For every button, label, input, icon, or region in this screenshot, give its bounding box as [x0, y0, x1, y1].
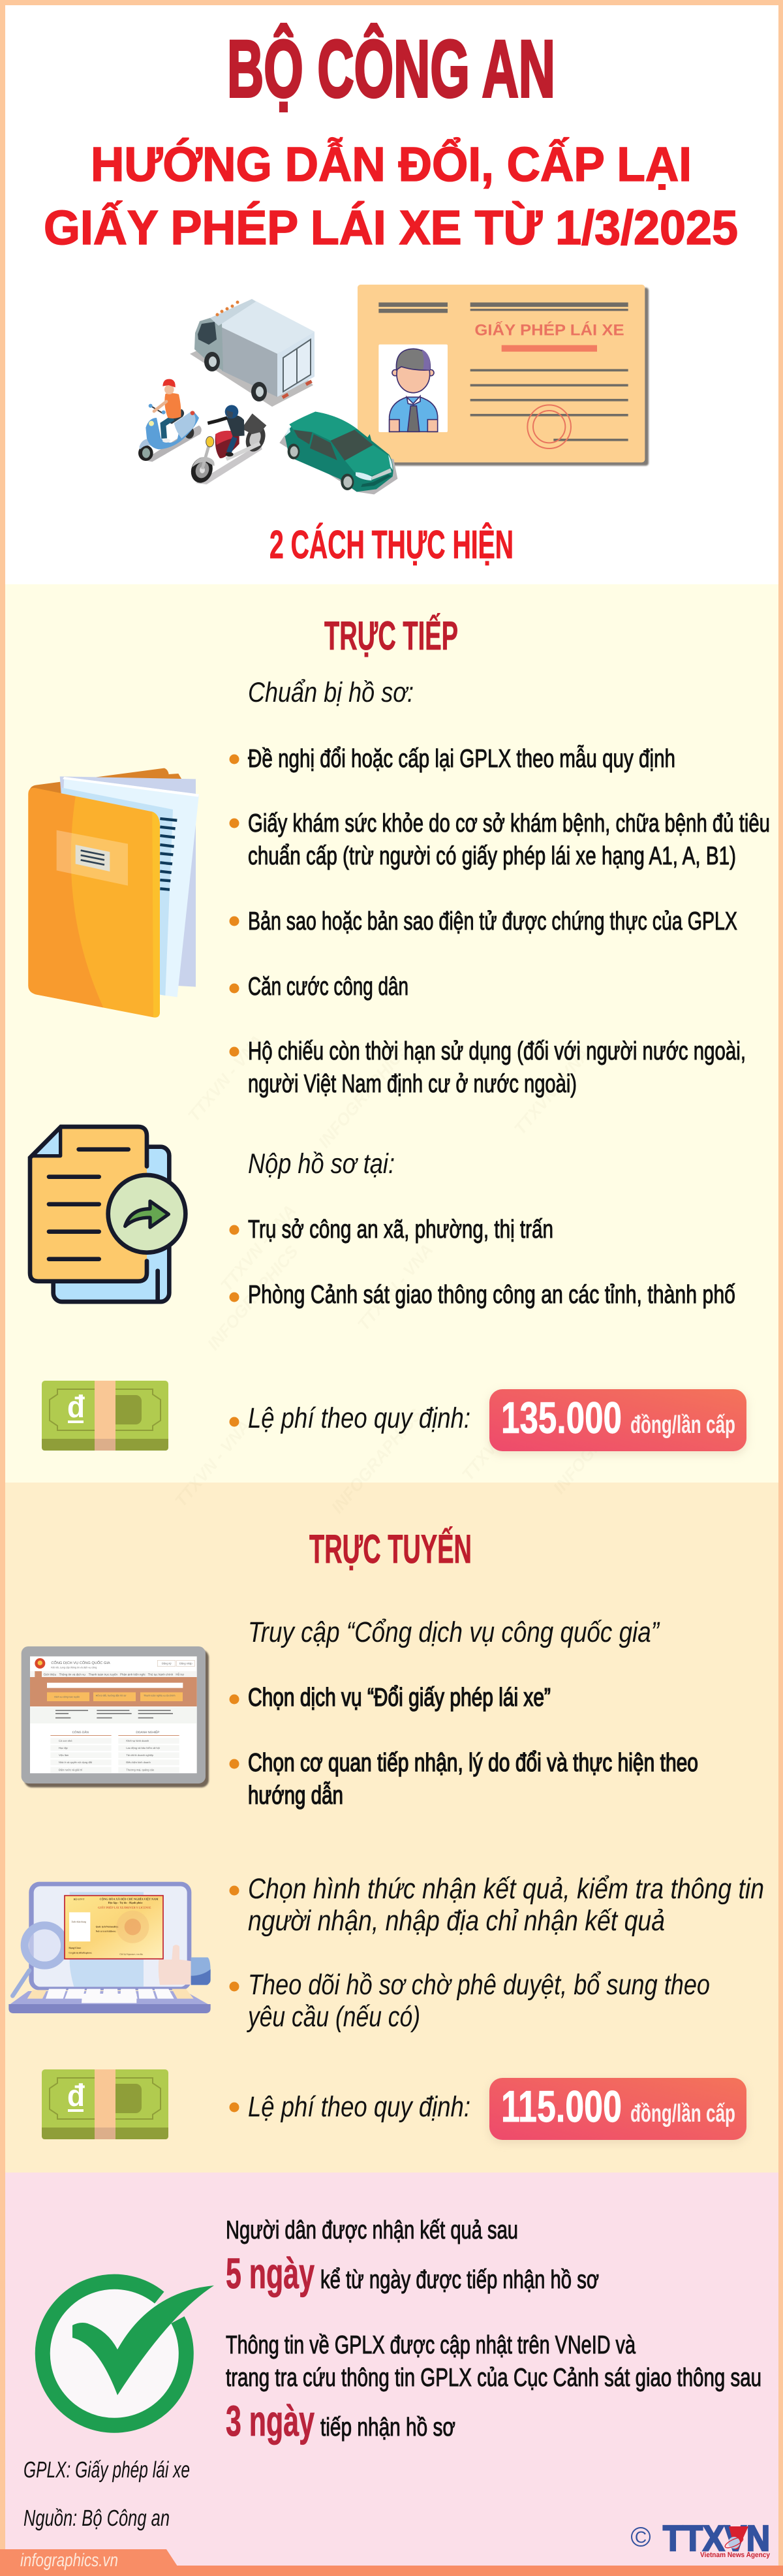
text: INFOGRAPHICS: [328, 1404, 426, 1517]
screenshot: national public service portal: Điều kiện kinh doanh: [126, 1761, 151, 1764]
screenshot: national public service portal: Thủ tục hành chính: [148, 1673, 173, 1676]
illustration: laptop with licence: Có giá trị đến/Expires:: [69, 1952, 92, 1955]
list: required documents: [230, 745, 770, 1098]
screenshot: national public service portal: Việc làm: [59, 1753, 69, 1757]
logo: TTXVN: TTXVN: [663, 2518, 770, 2558]
screenshot: national public service portal: Tài chính doanh nghiệp: [126, 1753, 153, 1757]
fee row: in person: đồng/lần cấp: [630, 1411, 735, 1439]
result text: 3 ngày: [226, 2396, 315, 2445]
subheading: access portal: Truy cập “Cổng dịch vụ công quốc gia”: [248, 1616, 660, 1648]
screenshot: national public service portal: Học tập: [59, 1746, 68, 1750]
footnote: source: Nguồn: Bộ Công an: [23, 2505, 170, 2531]
footer strip: [0, 2566, 783, 2576]
screenshot: national public service portal: Đăng nhập: [179, 1662, 192, 1665]
screenshot: national public service portal: Nhà ở và quyền sử dụng đất: [59, 1761, 92, 1764]
fee row: in person: Lệ phí theo quy định:: [248, 1402, 470, 1434]
icon: folder: [28, 768, 199, 1018]
list: online steps italic: [230, 1873, 764, 2033]
list: online steps italic: người nhận, nhập địa chỉ nhận kết quả: [248, 1905, 665, 1937]
screenshot: national public service portal: Thanh toán nghĩa vụ tài chính: [144, 1694, 176, 1697]
title: line 2: GIẤY PHÉP LÁI XE TỪ 1/3/2025: [44, 200, 738, 255]
title: line 1: HƯỚNG DẪN ĐỔI, CẤP LẠI: [91, 137, 692, 191]
screenshot: national public service portal: Thông tin và dịch vụ: [59, 1673, 85, 1676]
illustration: truck: [190, 299, 315, 407]
fee row: online: đồng/lần cấp: [630, 2100, 735, 2128]
text: TTXVN - VNA: [217, 1201, 300, 1295]
illustration: laptop with licence: GIẤY PHÉP LÁI XE/DRIVER'S LICENSE: [98, 1906, 151, 1909]
text: TTXVN - VNA: [354, 1240, 437, 1334]
illustration: car: [279, 412, 397, 494]
illustration: laptop with licence: Hạng/Class:: [69, 1947, 81, 1949]
illustration: laptop with licence: Chữ ký/Signature, con dấu: [119, 1953, 143, 1955]
logo: TTXVN: C: [635, 2528, 647, 2547]
icon: money bundle: [42, 1381, 168, 1451]
screenshot: national public service portal: Thanh toán trực tuyến: [89, 1673, 117, 1676]
fee row: online: Lệ phí theo quy định:: [248, 2091, 470, 2123]
text: TTXVN - VNA: [510, 1045, 594, 1139]
result text: [226, 2216, 761, 2445]
screenshot: national public service portal: Dịch vụ công trực tuyến: [54, 1695, 80, 1698]
panel: header: [5, 5, 778, 584]
illustration: driving licence card: [358, 285, 649, 465]
text: TTXVN - VNA: [184, 1031, 268, 1125]
fee row: online: [230, 2078, 746, 2143]
title: agency: BỘ CÔNG AN: [227, 24, 555, 114]
illustration: laptop with licence: Nơi cư trú/Address:: [96, 1930, 116, 1932]
illustration: laptop with licence: BỘ GTVT: [74, 1898, 84, 1901]
text: INFOGRAPHICS: [315, 1039, 413, 1152]
icon: documents with forward arrow: [30, 1127, 185, 1302]
panel: result section background: [5, 2173, 778, 2566]
panel: in-person section background: [5, 584, 778, 1483]
result text: Thông tin về GPLX được cập nhật trên VNeID và: [226, 2331, 636, 2359]
list: online steps italic: yêu cầu (nếu có): [247, 2001, 420, 2033]
screenshot: national public service portal: Phản ánh kiến nghị: [120, 1673, 146, 1676]
footer tag: website: [0, 2549, 177, 2570]
result text: Người dân được nhận kết quả sau: [226, 2216, 518, 2244]
result text: 5 ngày: [226, 2249, 315, 2297]
heading: 2 ways: 2 CÁCH THỰC HIỆN: [269, 522, 514, 567]
list: online steps with portal: Chọn dịch vụ “Đổi giấy phép lái xe”: [248, 1684, 551, 1712]
list: where to submit: [230, 1216, 735, 1309]
text: INFOGRAPHICS: [549, 1385, 648, 1498]
list: online steps with portal: hướng dẫn: [248, 1782, 343, 1810]
screenshot: national public service portal: Lao động và bảo hiểm xã hội: [126, 1746, 160, 1750]
screenshot: national public service portal: Hỗ trợ đổi, hướng dẫn hồ sơ: [96, 1694, 126, 1697]
footer tag: website: infographics.vn: [20, 2550, 118, 2570]
screenshot: national public service portal: Có con nhỏ: [59, 1739, 72, 1742]
heading: in person: TRỰC TIẾP: [324, 613, 458, 659]
screenshot: national public service portal: CÔNG DÂN: [72, 1731, 89, 1734]
illustration: laptop with licence: Quốc tịch/Nationality:: [96, 1926, 119, 1928]
list: online steps with portal: [230, 1684, 698, 1810]
panel: online section background: [5, 1483, 778, 2173]
illustration: scooter with rider: [138, 379, 202, 462]
screenshot: national public service portal: DOANH NGHIỆP: [136, 1731, 159, 1734]
list: required documents: người Việt Nam định cư ở nước ngoài): [248, 1070, 577, 1098]
screenshot: national public service portal: Điện nước và giải trí: [59, 1768, 82, 1771]
result text: tiếp nhận hồ sơ: [320, 2413, 455, 2442]
result text: kể từ ngày được tiếp nhận hồ sơ: [320, 2266, 599, 2294]
screenshot: national public service portal: Giới thiệu: [44, 1673, 56, 1676]
text: TTXVN - VNA: [458, 1390, 542, 1484]
illustration: laptop with licence: [8, 1882, 211, 2013]
icon: money bundle online: [42, 2069, 168, 2139]
logo: TTXVN: Vietnam News Agency: [700, 2551, 771, 2559]
illustration: laptop with licence: CỘNG HÒA XÃ HỘI CHỦ NGHĨA VIỆT NAM: [100, 1898, 158, 1901]
illustration: driving licence card: GIẤY PHÉP LÁI XE: [474, 321, 624, 339]
illustration: laptop with licence: Độc lập - Tự do - Hạnh phúc: [108, 1901, 143, 1904]
screenshot: national public service portal: Đăng ký: [162, 1662, 172, 1665]
footnote: abbreviation: GPLX: Giấy phép lái xe: [23, 2457, 190, 2483]
text: INFOGRAPHICS: [204, 1241, 302, 1354]
illustration: motorbike with rider: [187, 405, 269, 486]
screenshot: national public service portal: Hỗ trợ: [176, 1673, 184, 1676]
subheading: submit at: Nộp hồ sơ tại:: [248, 1148, 395, 1180]
icon: money bundle online: đ: [67, 2079, 85, 2113]
fee row: in person: [230, 1389, 746, 1454]
screenshot: national public service portal: Kết nối, cung cấp thông tin và dịch vụ công: [51, 1667, 97, 1669]
screenshot: national public service portal: CỔNG DỊCH VỤ CÔNG QUỐC GIA: [51, 1661, 110, 1665]
subheading: prepare documents: Chuẩn bị hồ sơ:: [248, 677, 414, 708]
screenshot: national public service portal: Thương mại, quảng cáo: [126, 1768, 154, 1771]
screenshot: national public service portal: [22, 1646, 209, 1787]
icon: green check mark: [42, 2282, 214, 2425]
illustration: laptop with licence: Ảnh chân dung: [71, 1921, 86, 1923]
icon: money bundle: đ: [67, 1390, 85, 1424]
list: where to submit: Trụ sở công an xã, phường, thị trấn: [248, 1216, 553, 1244]
screenshot: national public service portal: Khởi sự kinh doanh: [126, 1739, 149, 1742]
text: TTXVN - VNA: [171, 1417, 254, 1511]
list: required documents: Căn cước công dân: [248, 973, 408, 1001]
heading: online: TRỰC TUYẾN: [309, 1526, 472, 1572]
fee row: in person: 135.000: [501, 1393, 622, 1443]
fee row: online: 115.000: [501, 2082, 622, 2131]
